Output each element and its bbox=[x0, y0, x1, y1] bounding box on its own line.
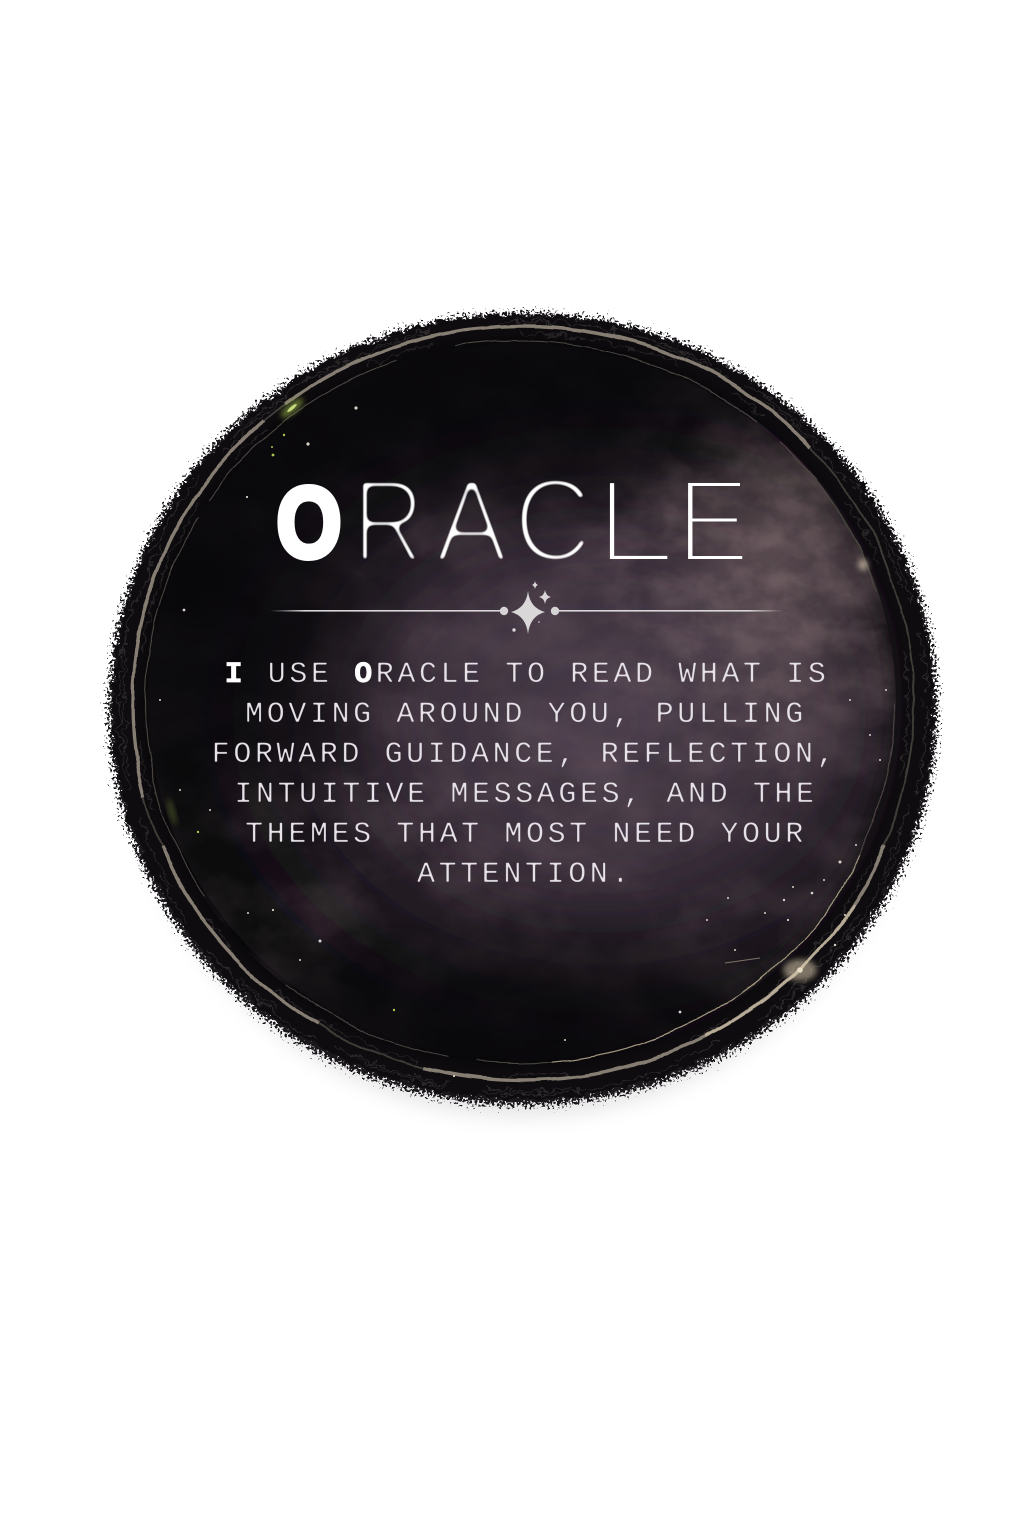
description text: INTUITIVE MESSAGES, AND THE bbox=[234, 778, 818, 812]
outer ring: flare arc bbox=[132, 326, 914, 1080]
title: letter C: C bbox=[514, 454, 592, 587]
rings bbox=[132, 326, 914, 1080]
divider with sparkle bbox=[270, 581, 783, 634]
icon: sparkle stars bbox=[511, 581, 551, 634]
outer ring: dim base bbox=[132, 326, 914, 1080]
description text: ATTENTION. bbox=[417, 858, 633, 892]
soft brush halo bbox=[127, 328, 919, 1116]
left shadow bbox=[144, 476, 388, 836]
brush edge: rough outer disc bbox=[113, 315, 933, 1099]
highlight: green glint bbox=[166, 395, 395, 1011]
inner ring: bright arc bbox=[145, 341, 895, 1063]
outer ring: bright arcs bbox=[132, 326, 914, 1080]
description text bbox=[212, 658, 838, 892]
description text: I bbox=[225, 658, 243, 692]
bottom shadow bbox=[270, 932, 756, 1064]
title: bold O: O bbox=[276, 467, 342, 579]
description text: RACLE TO READ WHAT IS bbox=[376, 658, 829, 692]
title: letter R: R bbox=[352, 455, 425, 588]
brush texture strokes bbox=[119, 320, 927, 1094]
speckles bbox=[159, 406, 887, 1077]
description text: O bbox=[354, 658, 372, 692]
title: letter A: A bbox=[435, 455, 509, 588]
upper right glow bbox=[656, 435, 881, 628]
inner ring: dim base bbox=[145, 341, 895, 1063]
description text: FORWARD GUIDANCE, REFLECTION, bbox=[212, 738, 838, 772]
description text: MOVING AROUND YOU, PULLING bbox=[245, 698, 807, 732]
description text: USE bbox=[268, 658, 333, 692]
disc texture bbox=[160, 349, 896, 1060]
highlight: warm flare bbox=[725, 559, 868, 981]
title: letter E: E bbox=[676, 455, 750, 588]
description text: THEMES THAT MOST NEED YOUR bbox=[245, 818, 807, 852]
title: letter L: L bbox=[592, 455, 677, 588]
title bbox=[276, 454, 750, 588]
inner glowing disc bbox=[148, 344, 892, 1060]
brush edge: grainy scatter bbox=[109, 313, 937, 1105]
panel: brushed dark circle bbox=[100, 306, 944, 1120]
right glow bbox=[724, 588, 870, 744]
top shadow bbox=[310, 340, 784, 518]
upper right mottling bbox=[591, 424, 896, 741]
cloud texture bbox=[204, 396, 896, 1000]
